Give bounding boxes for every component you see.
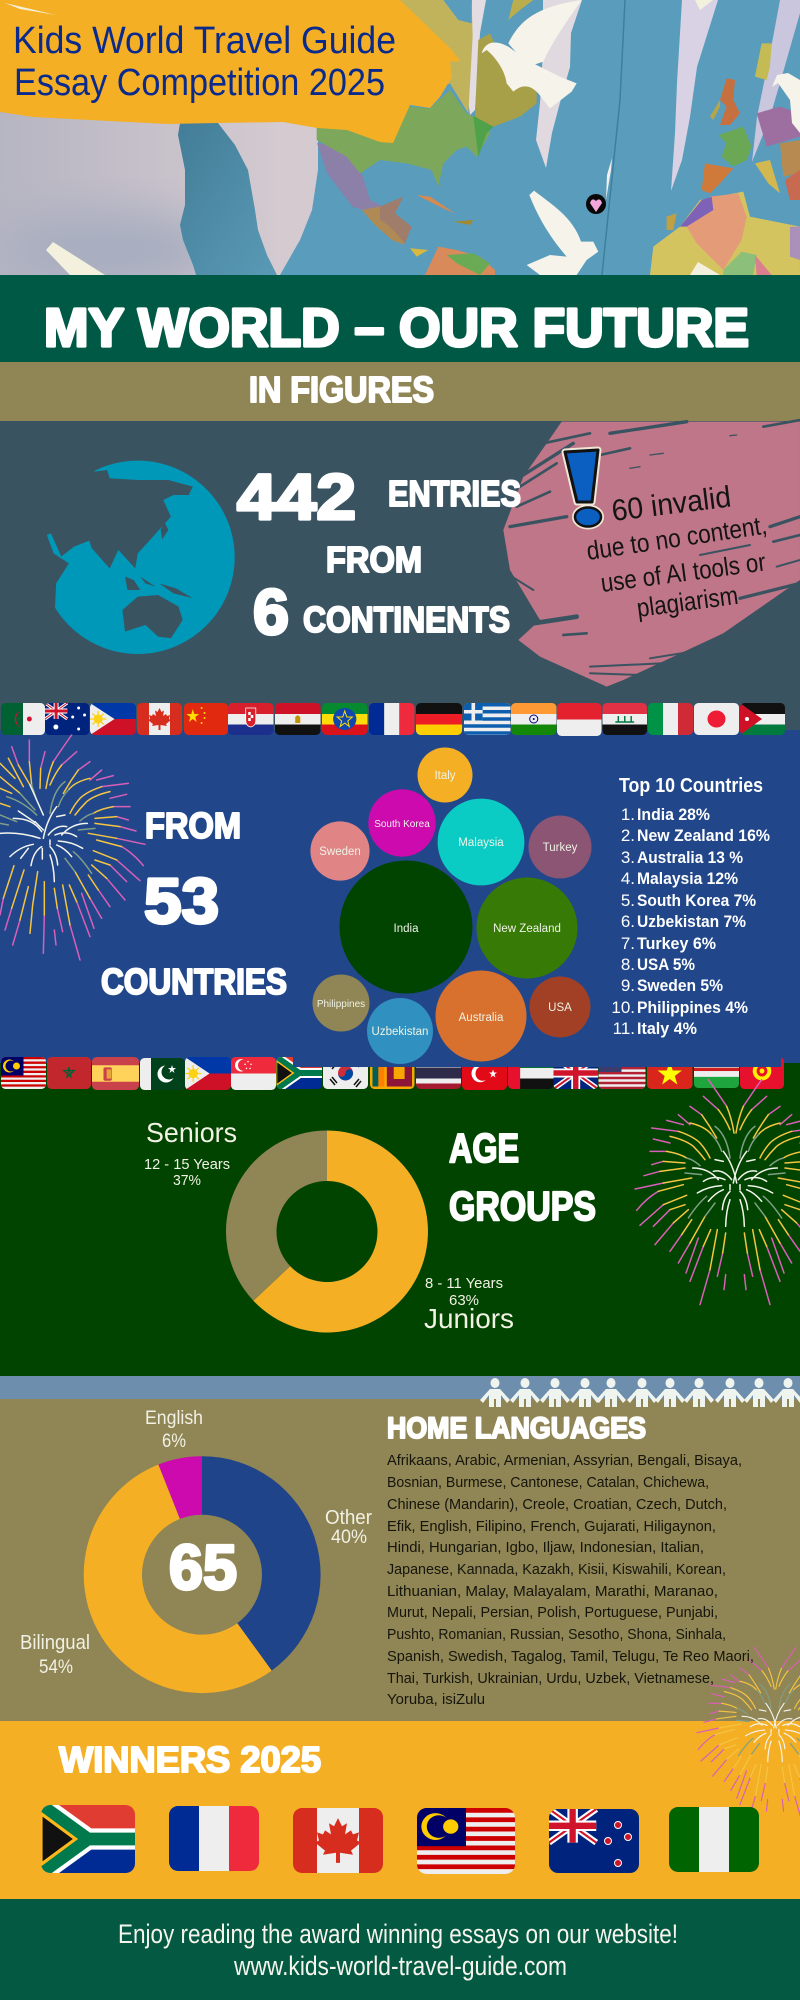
heading: from 53 countries: FROM bbox=[145, 805, 241, 846]
list items: 11. bbox=[613, 1019, 635, 1038]
panel: winners bbox=[0, 1647, 800, 1899]
bubble chart: Sweden bbox=[319, 846, 361, 858]
top 10 list bbox=[611, 775, 770, 1038]
heading: from 53 countries: 53 bbox=[144, 865, 219, 937]
bubble chart: Uzbekistan bbox=[372, 1026, 428, 1038]
callout: invalid entries: due to no content, bbox=[584, 510, 769, 566]
banner title: Kids World Travel Guide bbox=[13, 20, 396, 62]
label: other: Other bbox=[325, 1507, 372, 1529]
stat: 65: 65 bbox=[169, 1533, 237, 1603]
donut chart: languages bbox=[84, 1456, 321, 1693]
heading: age groups: AGE bbox=[449, 1125, 519, 1171]
strip: paper people bbox=[0, 1376, 800, 1721]
language list: Lithuanian, Malay, Malayalam, Marathi, Maranao, bbox=[387, 1583, 718, 1600]
icon: exclamation mark bbox=[565, 450, 601, 526]
bubble chart: Philippines bbox=[317, 999, 365, 1010]
winner flags bbox=[41, 1805, 759, 1874]
callout: invalid entries: plagiarism bbox=[635, 580, 740, 623]
language list: Pushto, Romanian, Russian, Sesotho, Shona, Sinhala, bbox=[387, 1626, 726, 1643]
list items: 4. bbox=[621, 869, 635, 888]
list items: 3. bbox=[621, 848, 635, 867]
label: bilingual: 54% bbox=[39, 1657, 73, 1678]
list items: Philippines 4% bbox=[637, 998, 748, 1017]
list items: Malaysia 12% bbox=[637, 869, 738, 888]
language list: Afrikaans, Arabic, Armenian, Assyrian, Bengali, Bisaya, bbox=[387, 1452, 742, 1469]
panel: age groups bbox=[0, 1057, 800, 1376]
stat: 6 continents: 6 bbox=[253, 576, 289, 648]
label: juniors: 8 - 11 Years bbox=[425, 1275, 503, 1292]
label: seniors bbox=[144, 1117, 237, 1189]
globe icon bbox=[31, 453, 235, 654]
label: juniors bbox=[424, 1275, 514, 1334]
stat: 442 entries: 442 bbox=[237, 461, 356, 533]
panel: home languages bbox=[20, 1408, 754, 1708]
banner title: Essay Competition 2025 bbox=[14, 62, 385, 104]
language list: Bosnian, Burmese, Cantonese, Catalan, Chichewa, bbox=[387, 1474, 709, 1491]
dove: top bbox=[482, 0, 582, 108]
yellow brush banner bbox=[0, 0, 460, 143]
firework bbox=[697, 1647, 800, 1823]
firework bbox=[635, 1080, 800, 1305]
heading: age groups: GROUPS bbox=[449, 1183, 596, 1229]
list items: India 28% bbox=[637, 805, 710, 824]
heading: home languages: HOME LANGUAGES bbox=[387, 1412, 646, 1445]
language list: Murut, Nepali, Persian, Polish, Portuguese, Punjabi, bbox=[387, 1604, 718, 1621]
stat: 6 continents bbox=[253, 576, 510, 648]
callout: invalid entries bbox=[584, 481, 769, 623]
footer bbox=[0, 1899, 800, 2000]
bubble chart: Malaysia bbox=[458, 837, 504, 849]
label: other bbox=[325, 1507, 372, 1548]
bubble chart: India bbox=[394, 923, 419, 935]
list items: 6. bbox=[621, 912, 635, 931]
label: bilingual: Bilingual bbox=[20, 1632, 90, 1654]
heading: winners 2025: WINNERS 2025 bbox=[59, 1739, 321, 1780]
list items: 2. bbox=[621, 826, 635, 845]
list items: New Zealand 16% bbox=[637, 826, 770, 845]
list items bbox=[611, 805, 770, 1038]
heading: age groups bbox=[449, 1125, 596, 1229]
list items: Sweden 5% bbox=[637, 976, 723, 995]
label: english: English bbox=[145, 1408, 203, 1429]
label: bilingual bbox=[20, 1632, 90, 1678]
label: seniors: Seniors bbox=[146, 1117, 237, 1148]
bubble chart: New Zealand bbox=[493, 923, 561, 935]
list items: Uzbekistan 7% bbox=[637, 912, 746, 931]
bubble chart: USA bbox=[548, 1002, 572, 1014]
language list: Efik, English, Filipino, French, Gujarati, Hiligaynon, bbox=[387, 1518, 716, 1535]
footer text: Enjoy reading the award winning essays on our website! bbox=[118, 1919, 678, 1949]
language list: Japanese, Kannada, Kazakh, Kisii, Kiswahili, Korean, bbox=[387, 1561, 726, 1578]
map: coloured land on the hand bbox=[317, 0, 800, 275]
callout: invalid entries: 60 invalid bbox=[610, 481, 733, 528]
list items: 9. bbox=[621, 976, 635, 995]
language list: Yoruba, isiZulu bbox=[387, 1691, 485, 1708]
bubble chart: Turkey bbox=[543, 842, 578, 854]
bubble chart: Australia bbox=[459, 1012, 504, 1024]
heading band: my world our future bbox=[0, 275, 800, 362]
callout: invalid entries: use of AI tools or bbox=[599, 547, 768, 598]
dove feathers bbox=[46, 0, 720, 275]
heading band: in figures bbox=[0, 362, 800, 421]
list items: 5. bbox=[621, 891, 635, 910]
footer text bbox=[118, 1919, 678, 1981]
dove: right edge bbox=[772, 73, 800, 133]
flag strip one bbox=[1, 703, 785, 736]
footer text: www.kids-world-travel-guide.com bbox=[233, 1951, 567, 1981]
list items: USA 5% bbox=[637, 955, 695, 974]
heading: from 53 countries: COUNTRIES bbox=[101, 961, 287, 1002]
stat: 442 entries: ENTRIES bbox=[388, 473, 521, 514]
pink brush stroke bbox=[503, 420, 800, 687]
hero photo: hand painted as a world map with doves bbox=[0, 0, 800, 290]
icon: black heart badge bbox=[586, 194, 606, 214]
list items: 1. bbox=[621, 805, 635, 824]
bubble chart: Italy bbox=[434, 770, 456, 782]
list items: 7. bbox=[621, 934, 635, 953]
paper people chain bbox=[480, 1378, 800, 1407]
list items: Italy 4% bbox=[637, 1019, 697, 1038]
dove: lower bbox=[527, 191, 598, 275]
list items: Turkey 6% bbox=[637, 934, 716, 953]
language list: Spanish, Swedish, Tagalog, Tamil, Telugu, Te Reo Maori, bbox=[387, 1648, 754, 1665]
stat: 6 continents: CONTINENTS bbox=[303, 599, 510, 640]
label: other: 40% bbox=[331, 1527, 367, 1548]
label: seniors: 37% bbox=[173, 1172, 201, 1189]
text: from: FROM bbox=[326, 539, 422, 580]
label: juniors: 63% bbox=[449, 1292, 479, 1309]
list items: Australia 13 % bbox=[637, 848, 743, 867]
firework bbox=[0, 735, 145, 960]
flag strip two bbox=[1, 1057, 784, 1090]
heading band: in figures: IN FIGURES bbox=[249, 369, 434, 410]
donut chart: age groups bbox=[226, 1130, 428, 1332]
panel: countries bbox=[0, 703, 800, 1063]
language list: Hindi, Hungarian, Igbo, Iljaw, Indonesian, Italian, bbox=[387, 1539, 704, 1556]
list items: 8. bbox=[621, 955, 635, 974]
label: seniors: 12 - 15 Years bbox=[144, 1156, 230, 1173]
language list: Chinese (Mandarin), Creole, Croatian, Czech, Dutch, bbox=[387, 1496, 727, 1513]
stat: 442 entries bbox=[237, 461, 521, 533]
list heading: Top 10 Countries bbox=[619, 775, 763, 797]
label: juniors: Juniors bbox=[424, 1303, 514, 1334]
blue panel overlay with bubble chart bbox=[293, 748, 781, 1067]
bubble chart bbox=[310, 748, 592, 1064]
label: english: 6% bbox=[162, 1431, 186, 1452]
list items: 10. bbox=[611, 998, 635, 1017]
language list bbox=[387, 1452, 754, 1708]
bubble chart: South Korea bbox=[374, 819, 430, 830]
panel: entries bbox=[0, 420, 800, 733]
banner title bbox=[13, 20, 396, 104]
list items: South Korea 7% bbox=[637, 891, 756, 910]
label: english bbox=[145, 1408, 203, 1452]
heading band: my world our future: MY WORLD – OUR FUTURE bbox=[44, 298, 749, 358]
heading: from 53 countries bbox=[101, 805, 287, 1002]
language list: Thai, Turkish, Ukrainian, Urdu, Uzbek, Vietnamese, bbox=[387, 1670, 714, 1687]
